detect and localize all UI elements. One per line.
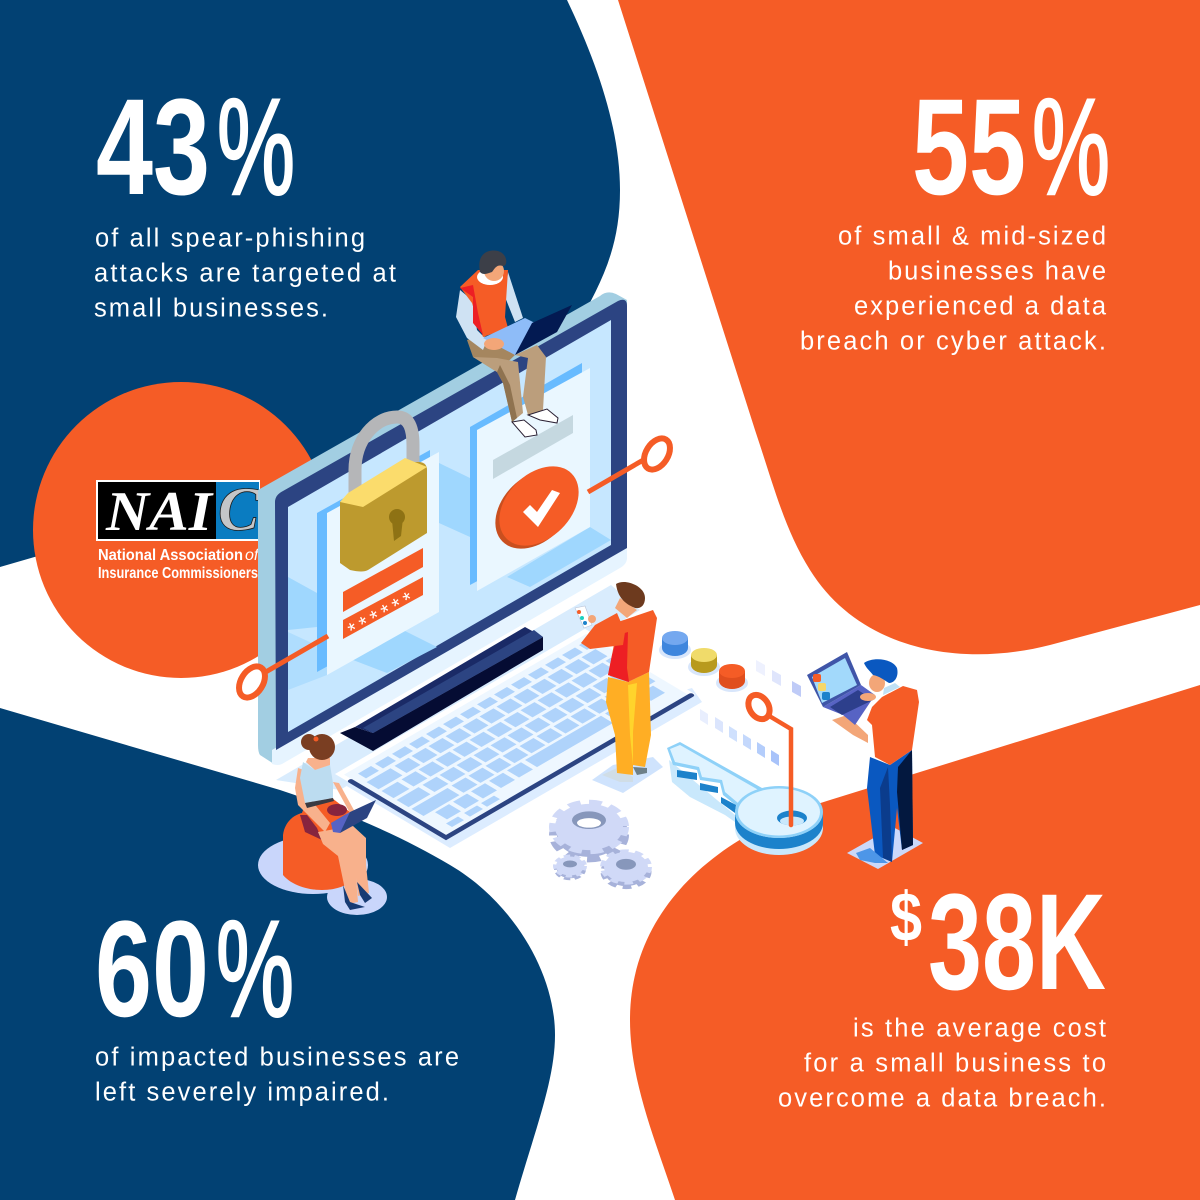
- keyboard outer pad: [345, 688, 702, 848]
- floor pad: [592, 757, 663, 793]
- shoes: [602, 768, 633, 782]
- right arm: [333, 782, 355, 813]
- pants: [606, 672, 651, 775]
- logo: NAIC: [96, 476, 260, 582]
- stat: 38K dollars: for a small business to: [804, 1050, 1106, 1078]
- legs: [318, 826, 369, 904]
- laptop screen: [807, 652, 861, 707]
- collar and face: [477, 269, 503, 285]
- stat: 43 percent: of all spear-phishing: [95, 224, 365, 252]
- monitor back shell: [258, 292, 627, 764]
- icon: padlock: [340, 417, 427, 572]
- key lower body: [735, 801, 823, 855]
- logo: NAIC: Insurance Commissioners: [98, 565, 258, 582]
- stat: 60 percent: of impacted businesses are: [95, 1044, 459, 1072]
- panel: orange bottom-right background: [630, 685, 1200, 1200]
- hand: [484, 338, 504, 350]
- person: seated woman: [258, 734, 387, 915]
- left leg: [473, 357, 523, 422]
- stat: 38K dollars: 38K: [928, 866, 1106, 1019]
- connector: right ring: [588, 434, 675, 492]
- logo: NAIC: National Association: [98, 547, 243, 564]
- key ring pointer: [744, 691, 791, 825]
- stat: 43 percent: small businesses.: [94, 294, 328, 322]
- panel: orange top-right background: [618, 0, 1200, 654]
- small gear: [556, 856, 584, 878]
- torso: [300, 762, 333, 803]
- medium gear: [604, 852, 648, 886]
- stat: 38K dollars: is the average cost: [853, 1014, 1106, 1042]
- person: standing man with phone: [575, 582, 663, 793]
- stat: 38K dollars: [778, 866, 1106, 1112]
- phone: [575, 606, 592, 628]
- collar: [883, 683, 900, 695]
- stat: 60 percent: 60: [95, 893, 209, 1046]
- connector: left ring: [234, 636, 328, 702]
- illustration: monitor: [258, 292, 627, 765]
- stat: 43 percent: [94, 71, 396, 322]
- face: [869, 674, 885, 692]
- thigh: [467, 335, 515, 372]
- hand: [588, 615, 596, 623]
- panel: navy bottom-left background: [0, 708, 555, 1200]
- right leg: [515, 345, 546, 415]
- stat: 55 percent: [800, 71, 1110, 356]
- shirt: [867, 686, 919, 765]
- fading square dots, upper row: [756, 660, 801, 697]
- vest: [460, 270, 508, 337]
- monitor frame: [275, 300, 627, 750]
- illustration: monitor base pad: [276, 585, 640, 790]
- stat: 60 percent: %: [216, 893, 294, 1046]
- illustration: monitor stand: [340, 627, 543, 751]
- arm: [581, 613, 625, 649]
- stat: 55 percent: businesses have: [888, 258, 1106, 286]
- login fields: ******: [344, 586, 421, 642]
- hair: [616, 582, 645, 608]
- person: man sitting on monitor: [456, 250, 572, 437]
- typing hand: [860, 693, 876, 701]
- torso: [608, 610, 657, 682]
- hair: [864, 659, 898, 683]
- key teeth: [677, 770, 697, 780]
- large gear: [555, 804, 623, 857]
- laptop base: [823, 685, 875, 725]
- stat: 55 percent: 55: [912, 71, 1026, 224]
- right document: [470, 363, 582, 585]
- stat: 43 percent: %: [217, 71, 295, 224]
- grey title bar: [493, 415, 573, 479]
- illustration: keyboard: [335, 629, 702, 848]
- pants: [867, 750, 913, 862]
- floor discs: [258, 836, 368, 894]
- gears: [555, 804, 648, 886]
- key head: [735, 786, 823, 838]
- monitor lower lip: [272, 546, 627, 765]
- laptop: [483, 318, 535, 355]
- fading square dots, lower row: [700, 709, 779, 766]
- key top outline: [667, 742, 783, 807]
- keyboard edge: [351, 639, 691, 838]
- panel: orange circle behind logo: [33, 382, 329, 678]
- stat: 43 percent: attacks are targeted at: [94, 260, 396, 288]
- stat: 43 percent: 43: [96, 71, 210, 224]
- hair: [479, 250, 506, 274]
- stat: 60 percent: [95, 893, 459, 1106]
- keyboard keys: [355, 638, 684, 830]
- status discs: [659, 631, 748, 692]
- stat: 55 percent: experienced a data: [854, 292, 1107, 320]
- person: man with laptop: [807, 652, 923, 869]
- arm and hand: [832, 715, 868, 743]
- shoes: [343, 885, 365, 910]
- stat: 60 percent: left severely impaired.: [95, 1078, 389, 1106]
- stat: 38K dollars: overcome a data breach.: [778, 1084, 1106, 1112]
- login fields: [343, 548, 423, 642]
- neck and face: [306, 758, 330, 770]
- left arm: [295, 768, 330, 832]
- key illustration: [667, 742, 823, 855]
- stat: 55 percent: of small & mid-sized: [838, 222, 1106, 250]
- stat: 38K dollars: $: [890, 878, 922, 956]
- logo: NAIC: of: [245, 547, 260, 564]
- logo: NAIC: NAI: [105, 481, 214, 543]
- orange stool: [283, 812, 357, 890]
- stat: 55 percent: %: [1032, 71, 1110, 224]
- stat: 55 percent: breach or cyber attack.: [800, 328, 1106, 356]
- panel: navy top-left background: [0, 0, 620, 567]
- hair: [309, 734, 335, 760]
- shoes: [512, 420, 537, 437]
- left document: [317, 450, 430, 672]
- icon: check badge: [480, 451, 594, 564]
- laptop: [331, 812, 355, 833]
- shoe: [856, 848, 888, 863]
- sleeves: [456, 290, 487, 350]
- neck and face: [615, 598, 637, 618]
- monitor screen: [288, 320, 611, 732]
- keyboard body: [335, 629, 695, 839]
- skirt: [300, 798, 350, 840]
- floor pad: [847, 827, 923, 869]
- logo: NAIC: C: [218, 476, 260, 544]
